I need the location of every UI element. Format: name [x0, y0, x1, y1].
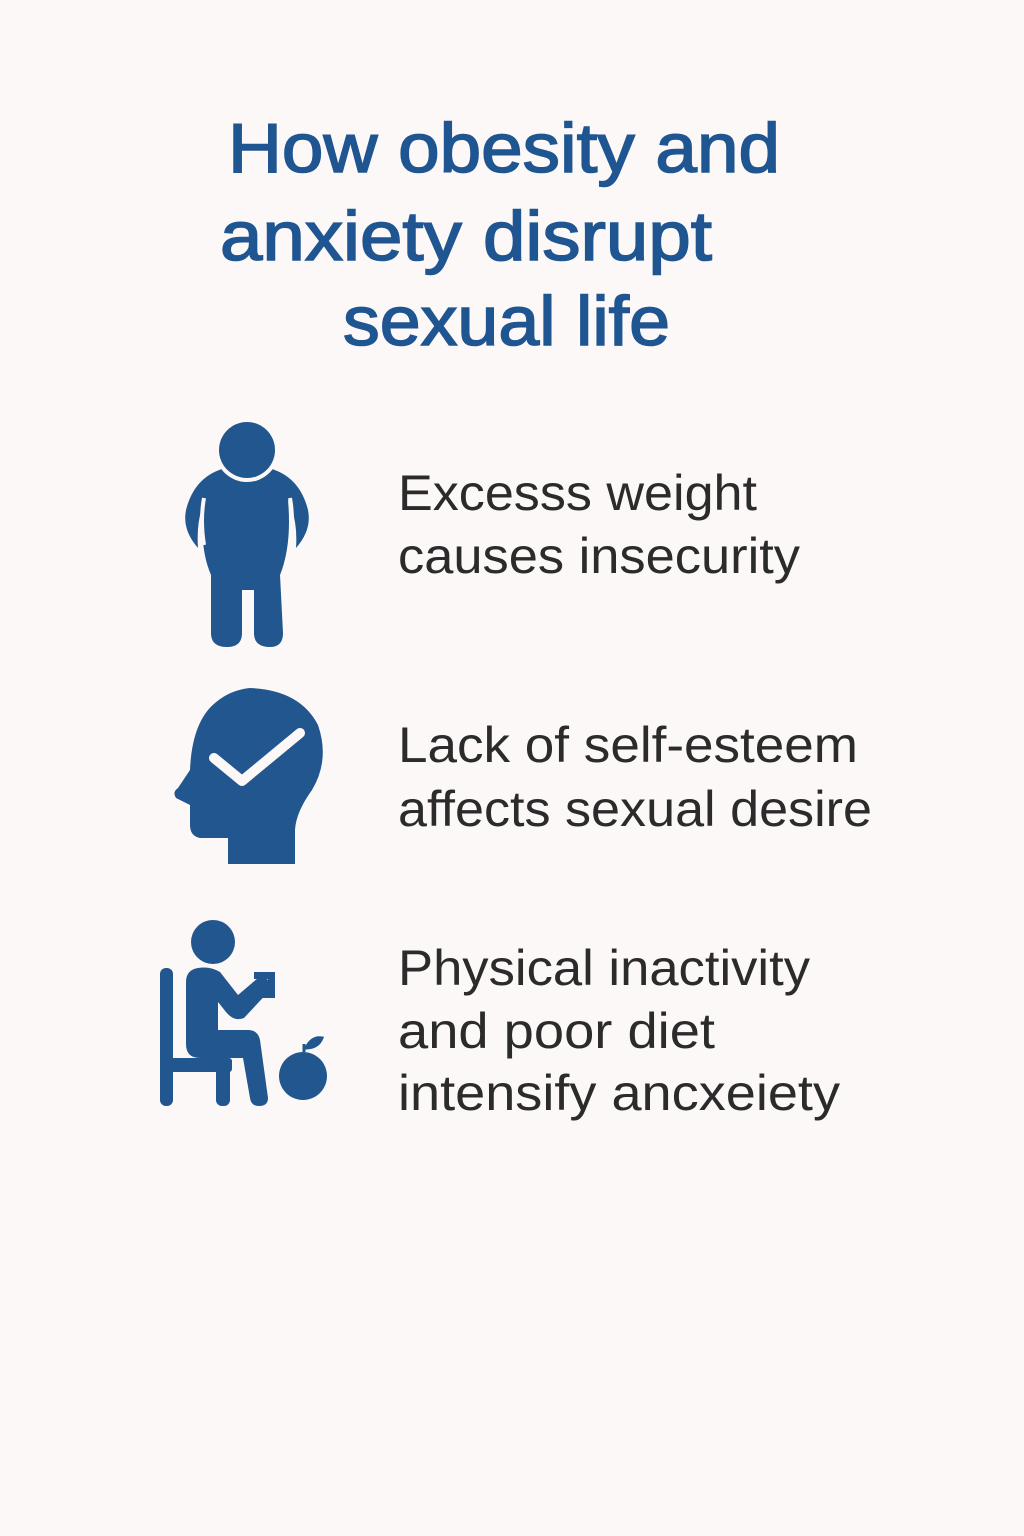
text: item 1 [398, 465, 800, 584]
text: item 3 [398, 940, 840, 1121]
text: item 3: and poor diet [398, 1003, 715, 1059]
icon: seated person with apple [160, 920, 327, 1106]
title: anxiety disrupt [220, 197, 712, 275]
title: sexual life [343, 282, 670, 360]
text: item 2: Lack of self-esteem [398, 717, 858, 773]
text: item 2: affects sexual desire [398, 781, 872, 837]
text: item 1: causes insecurity [398, 528, 800, 584]
title: How obesity and [228, 109, 780, 187]
text: item 2 [398, 717, 872, 837]
icon: head with checkmark [174, 688, 323, 864]
text: item 1: Excesss weight [398, 465, 757, 521]
title [220, 109, 780, 360]
icon: overweight person [185, 418, 309, 647]
text: item 3: intensify ancxeiety [398, 1065, 840, 1121]
text: item 3: Physical inactivity [398, 940, 810, 996]
